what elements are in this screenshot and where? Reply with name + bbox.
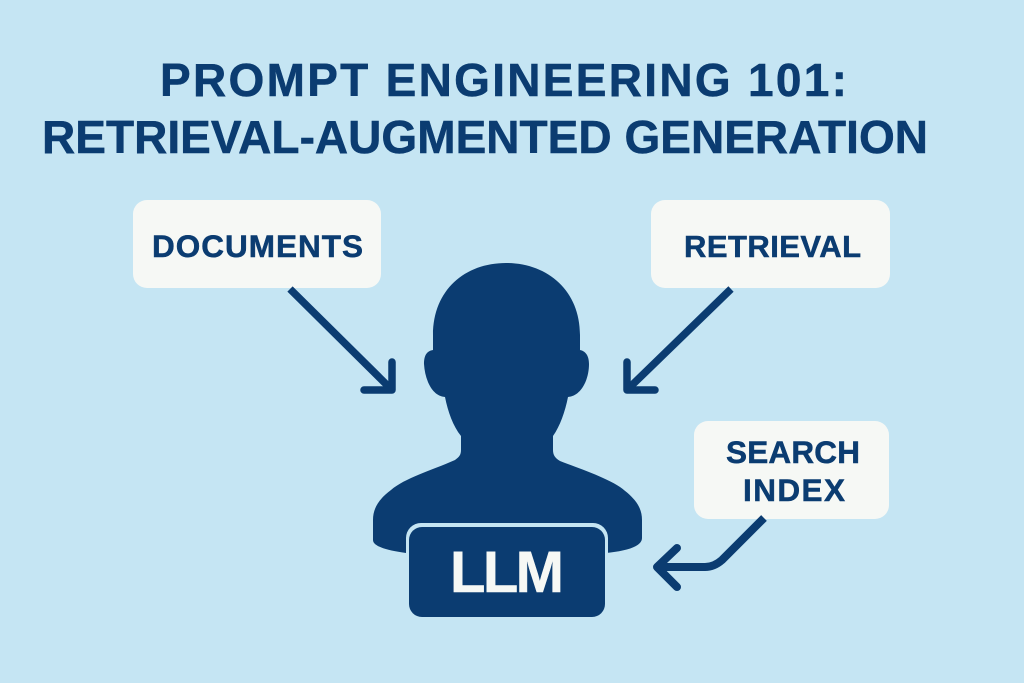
arrow: search index to LLM <box>657 518 764 587</box>
icon: person silhouette <box>373 263 642 553</box>
panel: retrieval: RETRIEVAL <box>684 229 861 264</box>
title: RETRIEVAL-AUGMENTED GENERATION <box>42 111 928 163</box>
title: PROMPT ENGINEERING 101: <box>160 54 847 106</box>
panel: documents <box>133 200 381 288</box>
panel: LLM badge: LLM <box>450 540 564 605</box>
arrow: documents to person <box>290 289 392 390</box>
panel: LLM badge <box>406 523 608 619</box>
panel: search index: INDEX <box>743 472 845 508</box>
title <box>42 54 928 163</box>
panel: retrieval <box>651 200 890 288</box>
arrow: retrieval to person <box>627 289 731 390</box>
panel: search index: SEARCH <box>726 434 860 470</box>
panel: search index <box>694 421 889 519</box>
panel: documents: DOCUMENTS <box>152 228 363 264</box>
